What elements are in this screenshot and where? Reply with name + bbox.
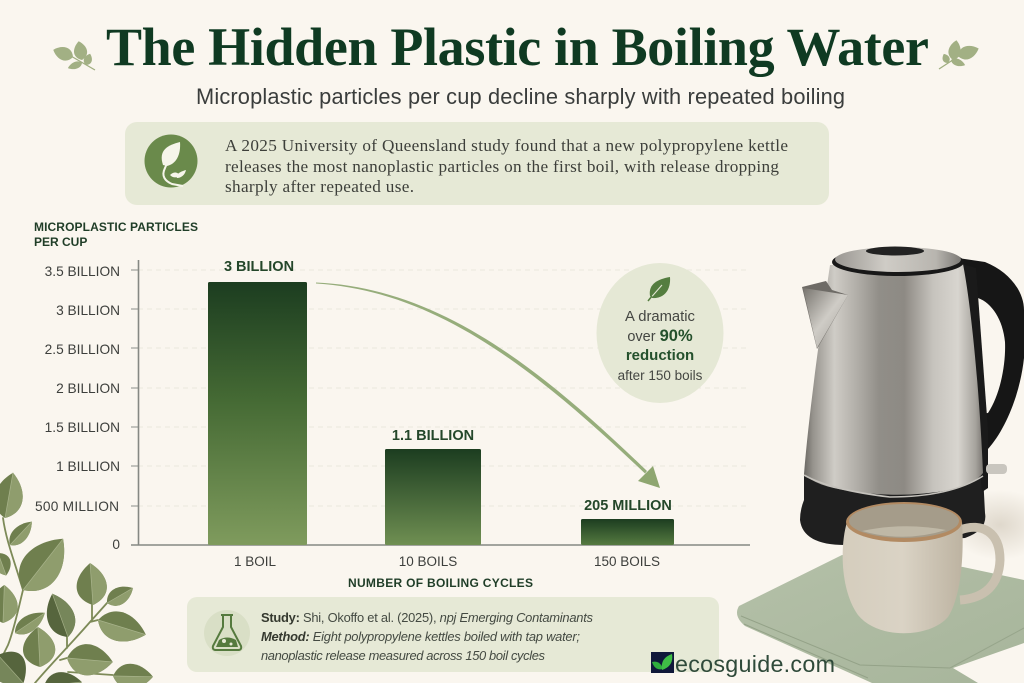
arrow: decline curve [316,282,660,488]
study text: Study: Shi, Okoffo et al. (2025), npj Emerging Contaminants [261,610,593,625]
bar: 150 boils [581,498,674,569]
kettle handle strip [962,264,988,492]
bar: 1 boil: 1 BOIL [234,554,276,569]
icon: left title sprig [51,40,95,71]
panel: study summary [125,122,829,205]
kettle base [800,474,985,545]
y axis tick labels [35,264,120,552]
mug body [843,522,963,633]
icon: leaf and sprout badge [144,134,198,188]
study text: Method: Eight polypropylene kettles boiled with tap water; [261,629,580,644]
callout: 90% reduction: after 150 boils [618,368,703,383]
bar chart [35,259,750,569]
subtitle: Microplastic particles per cup decline sharply with repeated boiling [196,84,845,109]
icon: flask [204,610,250,656]
kettle body [804,264,983,495]
title: The Hidden Plastic in Boiling Water [106,17,929,77]
summary text: sharply after repeated use. [225,177,414,196]
icon: callout leaf [648,277,670,301]
kettle base ring [804,475,983,497]
x axis title: NUMBER OF BOILING CYCLES [348,576,533,590]
mug rim [846,502,962,542]
bar: 1 boil [208,259,307,569]
illustration: kettle and mug [737,246,1024,683]
study text: nanoplastic release measured across 150 boil cycles [261,648,546,663]
y axis tick labels: 3 BILLION [56,303,120,318]
y axis title: PER CUP [34,235,87,249]
callout: 90% reduction: reduction [626,347,694,364]
callout: 90% reduction: over 90% [627,327,693,345]
kettle handle [958,258,1024,450]
summary text: releases the most nanoplastic particles on the first boil, with release dropping [225,157,779,176]
y axis tick labels: 2.5 BILLION [45,342,120,357]
towel [737,555,1024,683]
illustration: leafy branch [0,470,153,683]
y axis tick labels: 2 BILLION [56,381,120,396]
summary text: A 2025 University of Queensland study found that a new polypropylene kettle [225,136,788,155]
y axis tick labels: 500 MILLION [35,499,119,514]
callout: 90% reduction: A dramatic [625,309,696,325]
bar: 10 boils: 10 BOILS [399,554,457,569]
bar: 1 boil: 3 BILLION [224,259,294,275]
y axis tick labels: 1 BILLION [56,459,120,474]
y axis tick labels: 3.5 BILLION [45,264,120,279]
bar: 150 boils: 205 MILLION [584,498,672,514]
bar: 150 boils: 150 BOILS [594,554,660,569]
y axis tick labels: 1.5 BILLION [45,420,120,435]
kettle spout [802,281,848,349]
bar: 10 boils [385,428,481,569]
mug handle [960,527,1000,600]
kettle switch [986,464,1007,474]
callout: 90% reduction [596,263,724,403]
bar: 10 boils: 1.1 BILLION [392,428,474,444]
logo: ecosguide.com: ecosguide.com [675,651,835,677]
icon: right title sprig [939,39,981,69]
y axis title: MICROPLASTIC PARTICLES [34,220,198,234]
table shadow [950,490,1024,560]
kettle lid [832,246,964,276]
y axis tick labels: 0 [112,537,120,552]
panel: study and method [187,597,719,672]
icon: logo square [651,652,674,673]
